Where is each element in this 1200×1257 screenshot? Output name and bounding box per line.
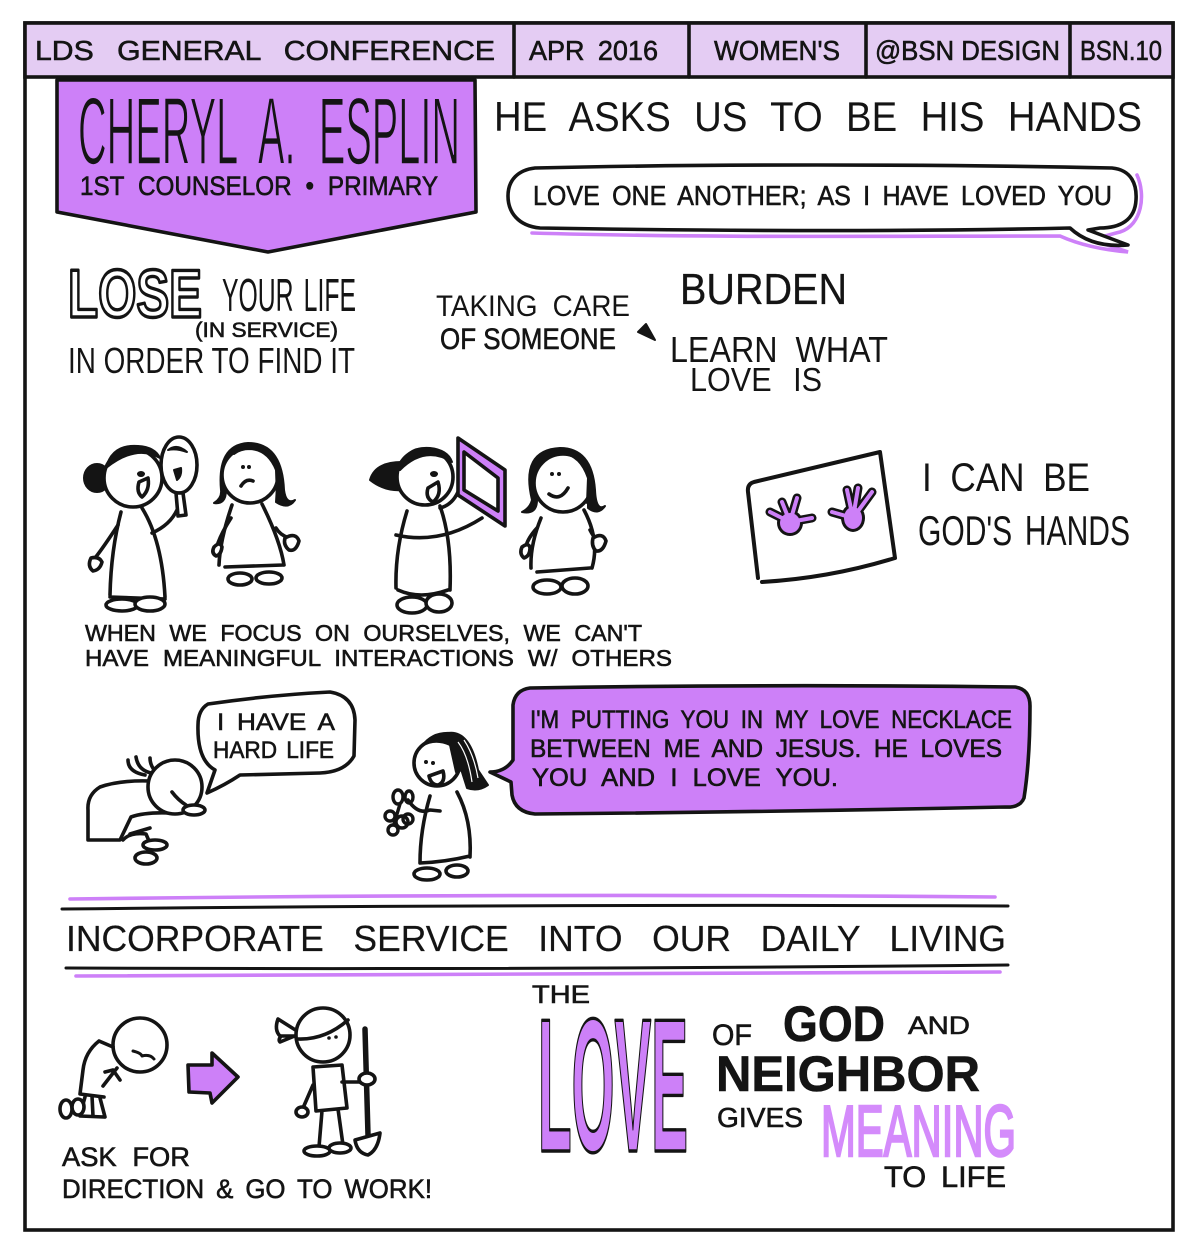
closing statement: AND [908, 1012, 970, 1040]
mirror [161, 437, 197, 516]
bubble: hard life [198, 692, 355, 793]
figure: unhappy woman [213, 443, 299, 585]
taking care note [436, 265, 888, 398]
bubble: hard life: I HAVE A [217, 709, 335, 736]
talk title: HE ASKS US TO BE HIS HANDS [494, 93, 1142, 140]
icon: left hand [770, 498, 812, 536]
arrow [188, 1053, 238, 1103]
header bar [25, 23, 1173, 77]
quote text: LOVE ONE ANOTHER; AS I HAVE LOVED YOU [533, 180, 1112, 211]
in service: (IN SERVICE) [195, 319, 338, 342]
figure: kneeling in prayer [60, 1018, 167, 1118]
shovel [355, 1029, 380, 1155]
word: meaning: MEANING [821, 1092, 1016, 1172]
icon: right hand [832, 488, 872, 532]
section heading: incorporate service: INCORPORATE SERVICE INTO OUR DAILY LIVING [66, 918, 1006, 959]
closing statement: GOD [783, 996, 885, 1052]
figure: sad bowed person with bubble [88, 692, 355, 864]
text: CHERYL A. ESPLIN [78, 78, 460, 185]
purple speech bubble: love necklace [490, 686, 1030, 814]
caption: meaningful interactions: WHEN WE FOCUS ON OURSELVES, WE CAN'T [85, 620, 642, 646]
caption: meaningful interactions [85, 620, 672, 671]
caption: meaningful interactions: HAVE MEANINGFUL INTERACTIONS W/ OTHERS [85, 645, 672, 671]
purple speech bubble: love necklace: I'M PUTTING YOU IN MY LOVE NECKLACE [530, 706, 1012, 734]
figure: girl with flowers [385, 733, 488, 880]
lose your life note [68, 256, 356, 381]
figure: smiling woman [521, 448, 606, 594]
bubble: hard life: HARD LIFE [213, 737, 334, 764]
of god and: OF [712, 1019, 752, 1052]
purple speech bubble: love necklace: YOU AND I LOVE YOU. [532, 764, 838, 792]
note: i can be god's hands [918, 456, 1130, 554]
header: conference: LDS GENERAL CONFERENCE [35, 35, 495, 66]
header: date: APR 2016 [529, 35, 658, 66]
caption: ask for direction [62, 1142, 432, 1204]
taking care of someone: TAKING CARE [436, 290, 630, 323]
speaker banner [57, 78, 476, 252]
learn what love is: LEARN WHAT [670, 329, 888, 370]
in order to find it: IN ORDER TO FIND IT [68, 340, 355, 381]
caption: ask for direction: DIRECTION & GO TO WORK! [62, 1174, 432, 1204]
caption: ask for direction: ASK FOR [62, 1142, 190, 1172]
speaker role: 1ST COUNSELOR • PRIMARY [80, 171, 438, 201]
purple frame [458, 438, 505, 526]
header: session: WOMEN'S [714, 35, 840, 66]
taking care note: OF SOMEONE [440, 323, 616, 356]
figure: woman looking in mirror [84, 437, 197, 611]
figure: woman holding frame [370, 438, 505, 613]
header: handle: @BSN DESIGN [875, 35, 1060, 66]
word: the: THE [532, 981, 590, 1009]
neighbor: NEIGHBOR [716, 1046, 980, 1102]
to life: TO LIFE [884, 1161, 1006, 1194]
flowers [385, 790, 413, 835]
purple speech bubble: love necklace: BETWEEN ME AND JESUS. HE LOVES [530, 735, 1002, 763]
arrow mark [638, 324, 655, 340]
your life: YOUR LIFE [222, 269, 356, 321]
gives: GIVES [717, 1102, 803, 1133]
closing statement: LOVE [538, 980, 688, 1192]
burden: BURDEN [680, 265, 847, 314]
icon: god's hands card [748, 452, 895, 582]
header: number: BSN.10 [1080, 35, 1162, 66]
note: i can be god's hands: I CAN BE [922, 456, 1090, 500]
taking care note: LOVE IS [690, 361, 822, 398]
figure: worker with shovel [276, 1008, 380, 1156]
quote speech bubble [508, 165, 1141, 252]
section heading: incorporate service [62, 895, 1008, 976]
word: lose: LOSE [68, 256, 202, 332]
